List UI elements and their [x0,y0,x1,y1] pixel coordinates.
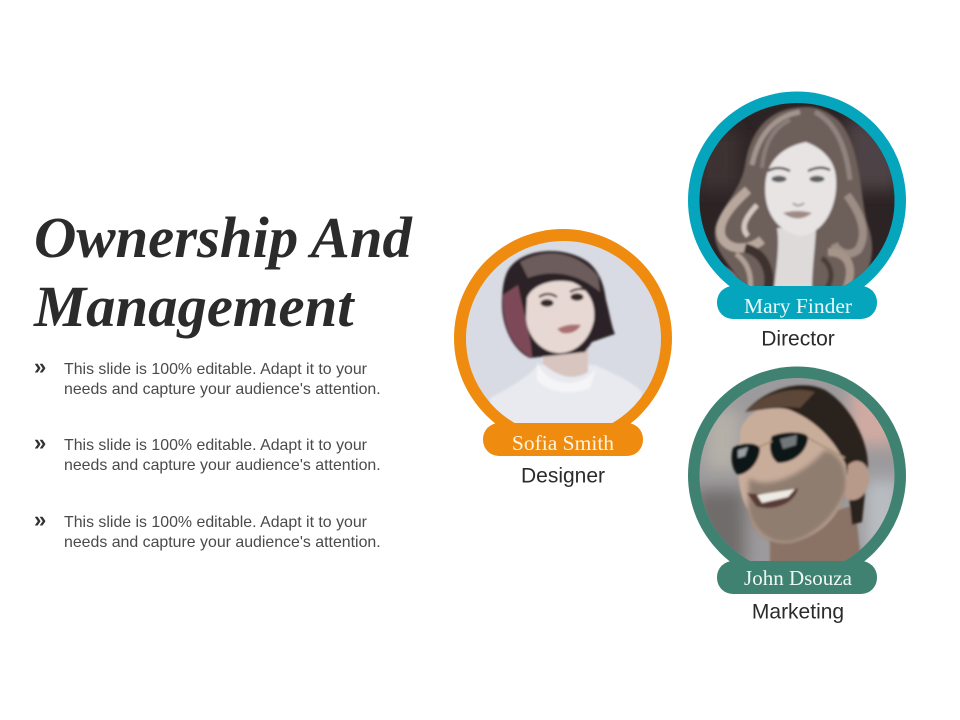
bullet text 1: This slide is 100% editable. Adapt it to your [64,361,367,378]
name pill: Sofia [483,423,643,456]
bullet text 2: » [34,430,46,455]
role: Marketing: Marketing [752,600,844,624]
ring: Mary [688,92,906,310]
bullet text 3: needs and capture your audience's attention. [64,534,381,550]
ring: John [688,366,906,584]
role: Designer: Designer [521,464,605,488]
bullet text 1 [34,354,381,398]
bullet text 1: » [34,354,46,379]
bullet text 1: needs and capture your audience's attention. [64,380,381,398]
title: Ownership And [34,205,412,270]
photo: John [700,378,894,561]
bullet text 3: » [34,507,46,532]
ring: Sofia [454,229,672,447]
role: Director: Director [761,328,835,350]
panel: Sofia Smith profile [454,229,672,488]
bullet text 2: needs and capture your audience's attention. [64,456,381,474]
title [33,205,413,339]
name pill: Mary [717,286,877,319]
name: Mary Finder: Mary Finder [744,294,852,318]
name: John Dsouza: John Dsouza [744,566,853,590]
photo: Mary [695,100,900,290]
name: Sofia Smith: Sofia Smith [512,431,614,455]
bullet text 3 [34,507,381,550]
bullet text 2: This slide is 100% editable. Adapt it to your [64,437,367,454]
panel: John Dsouza profile [688,366,906,624]
bullet text 2 [34,430,381,474]
photo: Sofia [466,241,661,423]
name pill: John [717,561,877,594]
title: Management [34,274,354,339]
bullet text 3: This slide is 100% editable. Adapt it to your [64,514,367,531]
panel: Mary Finder profile [688,92,906,350]
